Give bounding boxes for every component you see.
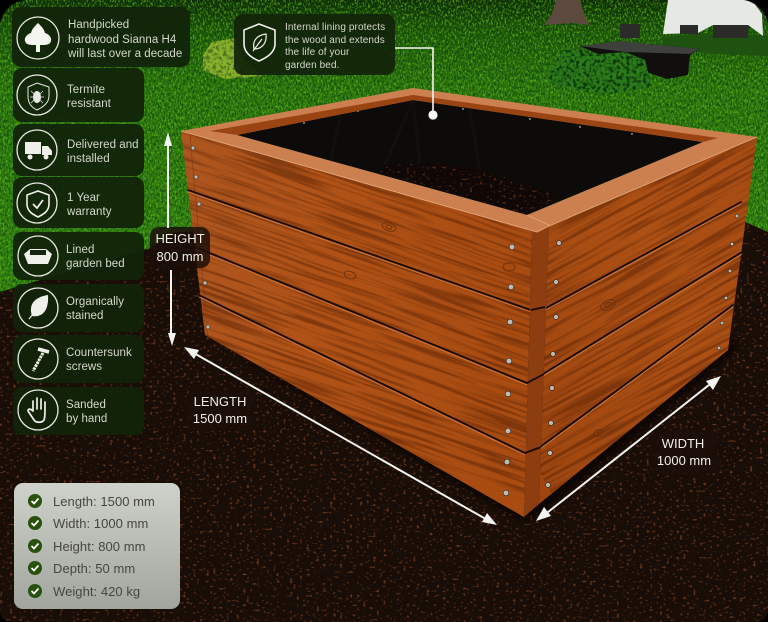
feature: lined	[13, 232, 144, 280]
icon: screw	[33, 349, 49, 371]
callout: internal lining: the wood and extends	[285, 35, 385, 46]
feature: organically stained: stained	[66, 310, 103, 322]
feature: hardwood: will last over a decade	[67, 48, 182, 60]
length arrow	[184, 347, 497, 525]
feature: countersunk screws: Countersunk	[66, 347, 132, 359]
width dimension label: WIDTH	[662, 436, 704, 451]
icon: hand	[28, 398, 45, 422]
feature: sanded by hand: Sanded	[66, 399, 106, 411]
corner post	[524, 226, 549, 517]
feature: lined: garden bed	[66, 258, 125, 270]
height dimension label: 800 mm	[157, 249, 203, 264]
feature: organically stained: Organically	[66, 296, 124, 308]
icon: truck	[25, 142, 52, 160]
icon: shield with leaf	[244, 24, 275, 61]
right face boards	[539, 138, 757, 504]
background: dark planter	[580, 41, 700, 79]
feature: hardwood: Handpicked	[68, 19, 129, 31]
icon: tree	[25, 23, 51, 52]
icon: leaf	[29, 295, 48, 319]
top rim	[181, 88, 757, 232]
spec: weight: Weight: 420 kg	[53, 584, 140, 599]
height dimension label	[150, 227, 210, 268]
feature: delivered: Delivered and	[67, 139, 139, 151]
spec: height: Height: 800 mm	[53, 539, 145, 554]
callout: internal lining: Internal lining protects	[285, 22, 385, 33]
specifications panel	[14, 483, 180, 609]
spec: length: Length: 1500 mm	[53, 494, 155, 509]
icon: lined bed	[24, 249, 52, 264]
feature: countersunk screws: screws	[66, 361, 102, 373]
feature: delivered	[13, 124, 144, 176]
screws	[191, 146, 739, 496]
icon: shield with bug	[28, 83, 49, 110]
background: hedge	[660, 33, 768, 56]
feature: hardwood: hardwood Sianna H4	[68, 34, 177, 46]
width dimension label: 1000 mm	[657, 453, 711, 468]
spec: width: Width: 1000 mm	[53, 516, 148, 531]
feature: sanded by hand: by hand	[66, 413, 107, 425]
feature: countersunk screws	[13, 335, 144, 383]
feature: termite resistant: resistant	[67, 98, 112, 110]
callout: internal lining: garden bed.	[285, 60, 339, 71]
feature: sanded by hand	[13, 387, 144, 435]
feature: warranty	[13, 177, 144, 228]
feature: delivered: installed	[67, 153, 110, 165]
bed interior: black lining	[237, 98, 703, 220]
background: tree trunk	[544, 0, 590, 25]
icon: shield with check	[27, 191, 49, 217]
background: green bush	[547, 47, 652, 94]
left face boards	[181, 132, 534, 517]
length dimension label: 1500 mm	[193, 411, 247, 426]
feature: hardwood	[12, 7, 190, 67]
background: white building	[663, 0, 763, 36]
feature: organically stained	[13, 284, 144, 332]
length dimension label	[186, 390, 254, 431]
background: pots	[620, 24, 748, 38]
background: yellow-green bush	[203, 38, 262, 79]
feature: termite resistant	[13, 68, 144, 122]
width arrow	[536, 376, 721, 521]
feature: termite resistant: Termite	[67, 84, 105, 96]
background: conifer	[727, 0, 752, 28]
spec: depth: Depth: 50 mm	[53, 561, 135, 576]
length dimension label: LENGTH	[194, 394, 246, 409]
height arrow	[164, 132, 176, 346]
callout leader line	[395, 48, 438, 120]
feature: warranty: 1 Year	[67, 192, 100, 204]
feature: warranty: warranty	[66, 206, 112, 218]
soil ground	[0, 222, 768, 622]
height dimension label: HEIGHT	[155, 231, 205, 246]
raised garden bed	[180, 88, 758, 517]
feature: lined: Lined	[66, 244, 94, 256]
corner seams	[525, 307, 545, 453]
width dimension label	[650, 430, 718, 474]
callout: internal lining: the life of your	[285, 47, 350, 58]
callout: internal lining	[234, 14, 395, 75]
